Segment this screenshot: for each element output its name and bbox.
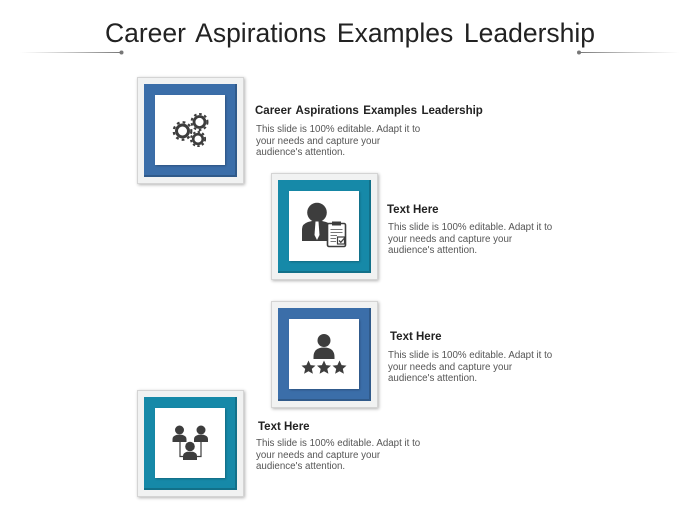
heading 3: Text Here xyxy=(390,331,442,343)
right title rule xyxy=(577,50,672,54)
text block 1: your needs and capture your xyxy=(256,136,380,147)
icon: person with clipboard xyxy=(302,202,346,248)
text block 3: audience's attention. xyxy=(388,373,477,384)
heading 1: Career Aspirations Examples Leadership xyxy=(255,105,483,117)
text block 2: your needs and capture your xyxy=(388,234,512,245)
panel: card 4 team xyxy=(137,390,244,497)
panel: card 1 gears xyxy=(137,77,244,184)
text block 3: your needs and capture your xyxy=(388,362,512,373)
text block 4: your needs and capture your xyxy=(256,450,380,461)
heading 2: Text Here xyxy=(387,204,439,216)
panel: card 3 person with stars xyxy=(271,301,378,408)
text block 2 xyxy=(388,222,552,256)
icon: team hierarchy xyxy=(172,426,208,460)
heading 4: Text Here xyxy=(258,421,310,433)
title: Career Aspirations Examples Leadership xyxy=(105,18,595,48)
text block 4: This slide is 100% editable. Adapt it to xyxy=(256,438,420,449)
text block 3 xyxy=(388,350,552,384)
text block 4: audience's attention. xyxy=(256,461,345,472)
left title rule xyxy=(28,50,124,54)
text block 1: audience's attention. xyxy=(256,147,345,158)
icon: gears xyxy=(172,113,208,147)
text block 1: This slide is 100% editable. Adapt it to xyxy=(256,124,420,135)
text block 1 xyxy=(256,124,420,158)
panel: card 2 person with clipboard xyxy=(271,173,378,280)
text block 2: audience's attention. xyxy=(388,245,477,256)
text block 2: This slide is 100% editable. Adapt it to xyxy=(388,222,552,233)
text block 4 xyxy=(256,438,420,472)
icon: person with three stars xyxy=(302,334,346,374)
text block 3: This slide is 100% editable. Adapt it to xyxy=(388,350,552,361)
